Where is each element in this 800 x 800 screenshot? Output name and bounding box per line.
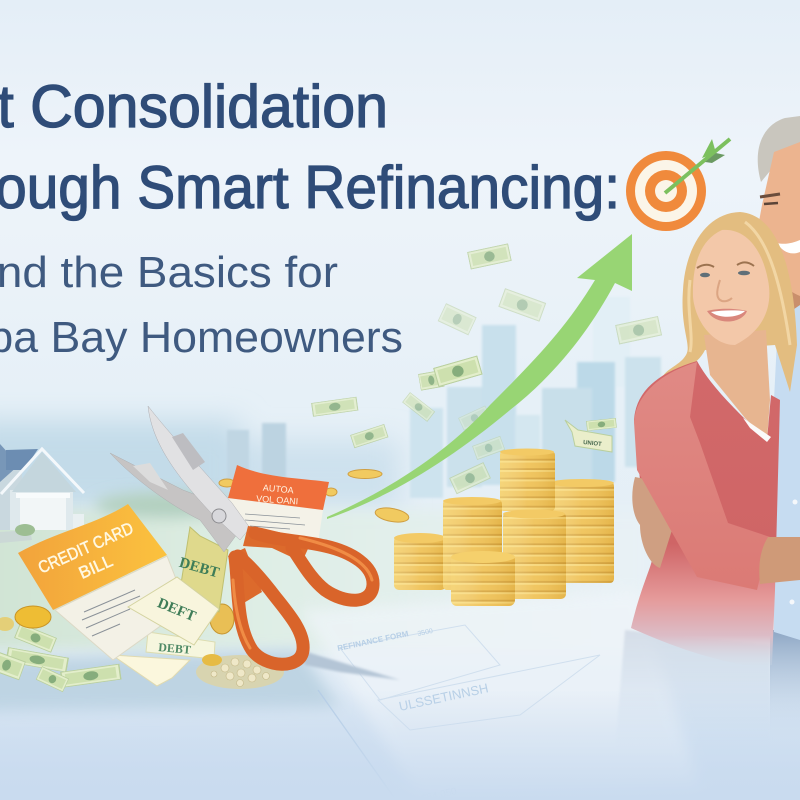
tag: upper [180,527,228,612]
man's neck [770,260,800,330]
money pile [0,604,234,692]
dart [665,139,730,193]
tag: lower [128,577,219,645]
shirt buttons [790,500,798,604]
blade: upper [148,406,250,540]
stack: front [451,551,515,606]
stack: left low [394,533,446,590]
man's jeans [770,630,800,740]
auto bill title: AUTOA [262,483,294,495]
scrap: paper under pile [112,655,190,686]
bill label: UNIOT [583,440,602,448]
form heading: REFINANCE FORM [337,629,410,653]
auto loan bill [228,465,329,543]
bill subtitle: BILL [76,551,116,583]
tag word: deft: DEFT [155,595,198,625]
man's hand [632,477,672,568]
undershirt [743,418,771,442]
form label: 3500 [417,628,434,638]
bill title: CREDIT CARD [35,519,136,577]
woman's face [693,230,769,345]
house [0,444,84,543]
flying coins [219,470,410,524]
stack: middle left [443,497,502,590]
flying dollar bills [312,244,662,494]
woman's trousers [615,630,770,750]
woman's top [631,361,780,666]
stack: middle right [503,510,566,599]
ground and lawn [0,492,650,712]
debt tags [128,527,228,645]
target [626,139,730,231]
stack: tall back [500,448,555,511]
form title: ULSSETINNSH [398,680,490,714]
scissors [110,406,373,664]
woman's hair [663,212,797,392]
distant city skyline [0,297,661,510]
scrap: small debt note: DEBT [158,640,192,657]
title [0,73,620,362]
bottom fade [0,690,800,800]
shadow of scissors [300,650,400,680]
blade: lower [110,453,240,552]
man's forearm [759,537,800,584]
couple [615,116,800,750]
bill body [55,556,187,660]
credit card bill [18,504,187,660]
document sheets on the table [300,590,700,800]
coin and crumb pile [196,654,284,689]
auto bill subtitle: VOL OANI [256,494,299,506]
bill scraps [112,632,215,686]
man's shirt [774,305,800,640]
stack: right [550,479,614,583]
coin stacks [394,448,614,606]
handle: lower [228,548,303,664]
tag word: debt: DEBT [177,555,221,581]
bill header [18,504,167,610]
woman's neck [704,330,770,440]
man's head [758,116,800,296]
pivot screw [212,509,226,523]
woman's sleeve [634,362,770,590]
growth arrow [327,234,632,519]
handle: upper [243,526,373,600]
